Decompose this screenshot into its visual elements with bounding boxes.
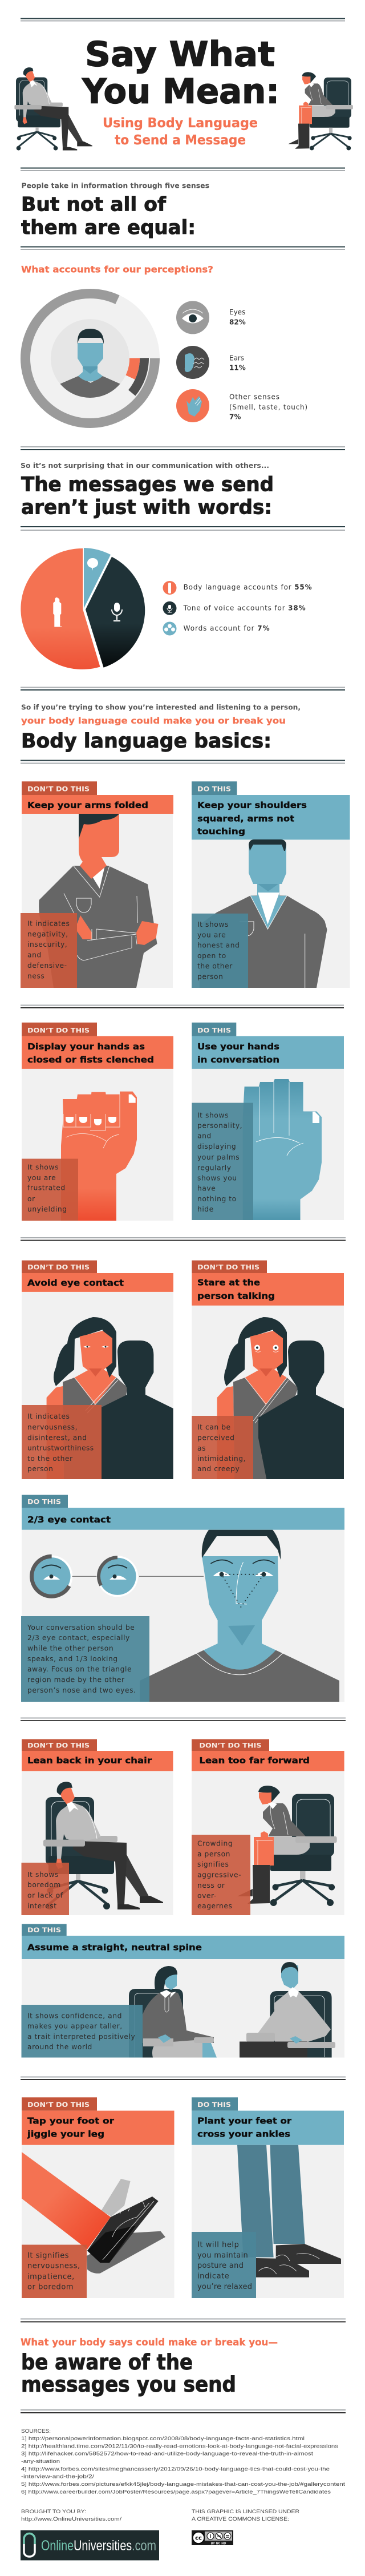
callout: squared shoulders meaning: person: [197, 973, 223, 981]
callout: staring meaning: as: [197, 1444, 206, 1452]
panel: neutral spine: Assume a straight, neutral spine: [27, 1943, 202, 1953]
license note: [192, 2509, 299, 2522]
illustration: woman leaning forward: [237, 1786, 337, 1906]
heading: messages: [21, 473, 274, 519]
heading: not all equal: them are equal:: [21, 216, 196, 239]
closing line: What your body says could make or break you—: [21, 2337, 278, 2348]
closing heading: be aware of the: [21, 2350, 193, 2375]
panel: lean forward: Lean too far forward: [199, 1755, 310, 1766]
illustration: woman looking away: [47, 1317, 173, 1479]
callout: lean back meaning: [22, 1863, 69, 1915]
sources: 4] http://www.forbes.com/sites/meghancasserly/2012/09/26/10-body-language-tics-that-could-cost-you-the: [21, 2466, 330, 2472]
section intro: body language: your body language could make you or break you: [21, 716, 286, 726]
panel: shoulders squared: Keep your shoulders: [197, 800, 307, 810]
section intro: body language: [21, 703, 301, 726]
callout: open hand meaning: shows you: [197, 1174, 237, 1182]
panel: lean forward: DON’T DO THIS: [199, 1742, 261, 1750]
panel: avoid eye contact: Avoid eye contact: [27, 1278, 124, 1288]
callout: open hand meaning: regularly: [197, 1164, 232, 1172]
callout: lean forward meaning: signifies: [197, 1860, 229, 1868]
label: eyes 82%: Eyes: [229, 308, 245, 316]
subheading: perceptions: What accounts for our perceptions?: [21, 264, 213, 274]
callout: open hand meaning: nothing to: [197, 1195, 237, 1203]
pie chart: communication: [21, 548, 145, 669]
panel: plant your feet: Plant your feet or: [197, 2115, 291, 2126]
panel: 2/3 eye contact: DO THIS: [27, 1497, 61, 1505]
sources: 5] http://www.forbes.com/pictures/efkk45jlej/body-language-mistakes-that-can-cost-you-the-job/#gallerycontent: [21, 2481, 345, 2488]
icon: touch hand: [176, 389, 209, 422]
illustration: man with squared shoulders: [200, 839, 327, 988]
panel: shoulders squared: touching: [197, 826, 245, 837]
badge: creative commons: cc: [195, 2535, 202, 2542]
heading: messages: The messages we send: [21, 473, 274, 496]
heading: not all equal: But not all of: [21, 193, 167, 216]
callout: lean forward meaning: a person: [197, 1850, 230, 1858]
panel: tap your foot: DON’T DO THIS: [27, 2101, 90, 2109]
icon: eyes looking toward, 2/3 arc: [31, 1556, 72, 1597]
callout: tapping meaning: It signifies: [27, 2252, 69, 2260]
callout: spine meaning: makes you appear taller,: [27, 2022, 123, 2030]
callout: spine meaning: It shows confidence, and: [27, 2012, 122, 2020]
panel: use your hands: Use your hands: [197, 1041, 279, 1052]
panel: neutral spine: DO THIS: [27, 1926, 61, 1934]
title: Say What: [85, 34, 275, 74]
callout: open hand meaning: and: [197, 1132, 212, 1140]
label: other senses 7%: (Smell, taste, touch): [229, 403, 307, 411]
callout: open hand meaning: It shows: [197, 1111, 229, 1119]
panel: tap your foot: [22, 2097, 175, 2298]
callout: arms folded meaning: ness: [27, 972, 44, 980]
sources: 1] http://personalpowerinformation.blogspot.com/2008/08/body-language-facts-and-statistics.html: [21, 2436, 305, 2442]
title: [82, 34, 279, 111]
panel: tap your foot: jiggle your leg: [27, 2129, 104, 2139]
panel: keep arms folded: [21, 781, 173, 988]
label: other senses 7%: 7%: [229, 413, 241, 421]
heading: messages: aren’t just with words:: [21, 496, 272, 519]
sources: 6] http://www.careerbuilder.com/JobPoster/Resources/page.aspx?pagever=Article_7ThingsWeTellCandidates: [21, 2489, 331, 2495]
callout: staring meaning: intimidating,: [197, 1455, 246, 1463]
sources: -any-situation: [21, 2458, 60, 2465]
callout: staring meaning: and creepy: [197, 1465, 240, 1473]
closing heading: [21, 2350, 236, 2397]
panel: neutral spine: [22, 1924, 344, 2058]
callout: avoiding eyes meaning: to the other: [27, 1455, 73, 1463]
callout: squared shoulders meaning: the other: [197, 962, 233, 970]
panel: shoulders squared: [192, 781, 350, 988]
callout: tapping meaning: impatience,: [27, 2272, 75, 2282]
label: eyes 82%: 82%: [229, 318, 246, 326]
callout: avoiding eyes meaning: untrustworthiness: [27, 1444, 94, 1452]
callout: lean forward meaning: over-: [197, 1892, 217, 1900]
callout: planted feet meaning: indicate: [197, 2272, 229, 2280]
label: other senses 7%: [229, 393, 307, 421]
callout: fist meaning: It shows: [27, 1163, 59, 1171]
callout: staring meaning: It can be: [197, 1423, 231, 1431]
callout: avoiding eyes meaning: disinterest, and: [27, 1434, 87, 1442]
callout: avoiding eyes meaning: It indicates: [27, 1412, 70, 1420]
callout: fist meaning: frustrated: [27, 1184, 66, 1192]
panel: use your hands: DO THIS: [197, 1027, 231, 1035]
panel: stare at person: DON’T DO THIS: [197, 1263, 259, 1271]
label: ears 11%: [229, 354, 246, 372]
callout: squared shoulders meaning: It shows: [197, 920, 229, 928]
panel: stare at person: Stare at the: [197, 1277, 260, 1287]
callout: 2/3 eye contact explanation: speaks, and 1/3 looking: [27, 1655, 118, 1663]
license note: A CREATIVE COMMONS LICENSE:: [192, 2516, 289, 2522]
panel: 2/3 eye contact: 2/3 eye contact: [27, 1515, 111, 1525]
panel: lean back: Lean back in your chair: [27, 1755, 152, 1766]
illustration: clenched fist: [61, 1092, 137, 1221]
logo: OnlineUniversities.com: OnlineUniversities.com: [41, 2538, 156, 2554]
panel: 2/3 eye contact: [21, 1495, 344, 1702]
badge: creative commons: BY NC ND: [211, 2542, 226, 2545]
panel: keep arms folded: Keep your arms folded: [27, 800, 148, 810]
callout: 2/3 eye contact explanation: while the other person: [27, 1645, 113, 1653]
sources: 3] http://lifehacker.com/5852572/how-to-read-and-utilize-body-language-to-reveal-the-truth-in-almost: [21, 2451, 313, 2457]
callout: arms folded meaning: [21, 913, 77, 988]
callout: arms folded meaning: It indicates: [27, 920, 70, 928]
section intro: five senses: People take in information through five senses: [22, 182, 209, 190]
callout: open hand meaning: personality,: [197, 1121, 242, 1129]
license note: THIS GRAPHIC IS LINCENSED UNDER: [192, 2509, 299, 2515]
title: You Mean:: [82, 71, 279, 111]
callout: staring meaning: perceived: [197, 1434, 235, 1442]
callout: spine meaning: around the world: [27, 2043, 92, 2051]
legend: pie chart: Body language accounts for 55%: [184, 583, 312, 591]
section intro: communication: So it’s not surprising that in our communication with others...: [21, 462, 269, 470]
callout: planted feet meaning: you maintain: [197, 2251, 248, 2260]
badge: creative commons: [192, 2530, 233, 2545]
callout: lean back meaning: boredom: [27, 1881, 61, 1889]
icon: eye: [176, 301, 209, 334]
illustration: man leaning back: [43, 1782, 163, 1909]
panel: plant your feet: DO THIS: [197, 2101, 231, 2109]
sources: -interview-and-the-job/2/: [21, 2474, 94, 2480]
callout: tapping meaning: [22, 2245, 87, 2298]
credit: http://www.OnlineUniversities.com/: [21, 2516, 121, 2522]
icon: ear: [176, 346, 209, 379]
panel: closed fists: DON’T DO THIS: [27, 1027, 90, 1035]
credit: [21, 2509, 121, 2522]
panel: lean back: DON’T DO THIS: [27, 1742, 90, 1750]
panel: closed fists: Display your hands as: [27, 1041, 145, 1052]
panel: use your hands: [192, 1023, 344, 1220]
panel: shoulders squared: squared, arms not: [197, 813, 295, 823]
callout: avoiding eyes meaning: person: [27, 1465, 53, 1473]
callout: 2/3 eye contact explanation: away. Focus on the triangle: [27, 1665, 132, 1673]
subtitle: [103, 116, 258, 148]
subtitle: to Send a Message: [115, 133, 246, 148]
label: ears 11%: 11%: [229, 364, 246, 372]
heading: basics: Body language basics:: [21, 730, 271, 753]
label: eyes 82%: [229, 308, 246, 326]
illustration: man with folded arms: [39, 814, 158, 988]
panel: use your hands: in conversation: [197, 1055, 279, 1065]
callout: open hand meaning: displaying: [197, 1142, 236, 1150]
callout: arms folded meaning: defensive-: [27, 962, 67, 970]
callout: planted feet meaning: posture and: [197, 2262, 244, 2270]
callout: open hand meaning: hide: [197, 1205, 214, 1213]
callout: lean back meaning: or lack of: [27, 1891, 63, 1899]
callout: 2/3 eye contact explanation: region made by the other: [27, 1675, 125, 1683]
panel: lean forward: [192, 1739, 344, 1915]
legend: pie chart: Tone of voice accounts for 38%: [183, 604, 306, 612]
icon: eyes looking away, 1/3 arc: [97, 1556, 138, 1597]
subtitle: Using Body Language: [103, 116, 258, 131]
panel: lean back: [22, 1739, 173, 1915]
section intro: body language: So if you’re trying to show you’re interested and listening to a person,: [21, 703, 301, 711]
panel: shoulders squared: DO THIS: [197, 785, 231, 793]
callout: open hand meaning: your palms: [197, 1153, 240, 1161]
callout: lean forward meaning: Crowding: [197, 1840, 233, 1848]
callout: lean forward meaning: ness or: [197, 1881, 225, 1889]
callout: planted feet meaning: you’re relaxed: [197, 2283, 252, 2291]
callout: lean forward meaning: eagernes: [197, 1902, 232, 1910]
sources: SOURCES:: [21, 2428, 51, 2434]
callout: arms folded meaning: insecurity,: [27, 940, 67, 948]
illustration: tapping leg and foot: [22, 2152, 165, 2274]
panel: avoid eye contact: [22, 1261, 173, 1479]
callout: spine meaning: [22, 2005, 143, 2058]
callout: open hand meaning: have: [197, 1185, 216, 1193]
panel: keep arms folded: DON’T DO THIS: [27, 785, 90, 793]
illustration: seated man with straight spine: [240, 1962, 335, 2058]
heading: not all equal: [21, 193, 196, 239]
label: ears 11%: Ears: [229, 354, 244, 362]
callout: planted feet meaning: It will help: [197, 2240, 239, 2249]
callout: 2/3 eye contact explanation: 2/3 eye contact, especially: [27, 1634, 130, 1642]
callout: lean back meaning: interest: [27, 1902, 57, 1910]
callout: lean forward meaning: [192, 1835, 250, 1915]
callout: open hand meaning: [192, 1103, 253, 1220]
panel: tap your foot: Tap your foot or: [27, 2115, 114, 2126]
callout: squared shoulders meaning: honest and: [197, 941, 240, 949]
illustration: planted feet: [237, 2145, 341, 2278]
callout: squared shoulders meaning: open to: [197, 952, 226, 960]
callout: tapping meaning: nervousness,: [27, 2262, 80, 2271]
callout: fist meaning: unyielding: [27, 1205, 67, 1213]
callout: arms folded meaning: and: [27, 951, 42, 959]
callout: squared shoulders meaning: you are: [197, 931, 226, 939]
callout: 2/3 eye contact explanation: [21, 1616, 149, 1702]
callout: squared shoulders meaning: [192, 914, 248, 988]
panel: stare at person: person talking: [197, 1291, 275, 1301]
sources: [21, 2428, 345, 2495]
illustration: man leaning back in chair: [14, 67, 92, 151]
illustration: woman leaning forward in chair: [288, 72, 353, 150]
callout: avoiding eyes meaning: [22, 1405, 102, 1479]
label: other senses 7%: Other senses: [229, 393, 279, 401]
callout: planted feet meaning: [192, 2232, 256, 2298]
donut chart: perceptions: [21, 289, 160, 428]
sources: 2] http://healthland.time.com/2012/11/30/to-really-read-emotions-look-at-body-language-not-facial-expressions: [21, 2443, 338, 2449]
logo: OnlineUniversities.com: [21, 2530, 159, 2560]
callout: lean back meaning: It shows: [27, 1871, 59, 1879]
callout: spine meaning: a trait interpreted positively: [27, 2033, 135, 2041]
panel: stare at person: [192, 1261, 344, 1479]
callout: fist meaning: [22, 1158, 78, 1221]
panel: plant your feet: cross your ankles: [197, 2129, 290, 2139]
callout: 2/3 eye contact explanation: person’s nose and two eyes.: [27, 1686, 136, 1694]
illustration: open hand: [243, 1079, 322, 1220]
callout: arms folded meaning: negativity,: [27, 930, 68, 938]
callout: 2/3 eye contact explanation: Your conversation should be: [27, 1624, 135, 1632]
callout: avoiding eyes meaning: nervousness,: [27, 1423, 78, 1431]
connector lines: [72, 1576, 204, 1577]
callout: lean forward meaning: aggressive-: [197, 1871, 241, 1879]
illustration: man face with eye-contact triangle: [140, 1530, 339, 1702]
credit: BROUGHT TO YOU BY:: [21, 2509, 86, 2515]
legend: pie chart: [163, 581, 312, 636]
callout: tapping meaning: or boredom: [27, 2283, 74, 2292]
panel: plant your feet: [192, 2097, 344, 2298]
panel: avoid eye contact: DON’T DO THIS: [27, 1263, 90, 1271]
closing heading: messages you send: [21, 2372, 236, 2397]
panel: closed fists: closed or fists clenched: [27, 1055, 154, 1065]
callout: staring meaning: [192, 1416, 253, 1479]
callout: fist meaning: you are: [27, 1174, 56, 1182]
panel: closed fists: [22, 1023, 173, 1221]
legend: pie chart: Words account for 7%: [184, 624, 270, 632]
callout: fist meaning: or: [27, 1195, 35, 1203]
illustration: woman staring: [217, 1317, 344, 1479]
illustration: seated woman with straight spine: [129, 1966, 217, 2058]
